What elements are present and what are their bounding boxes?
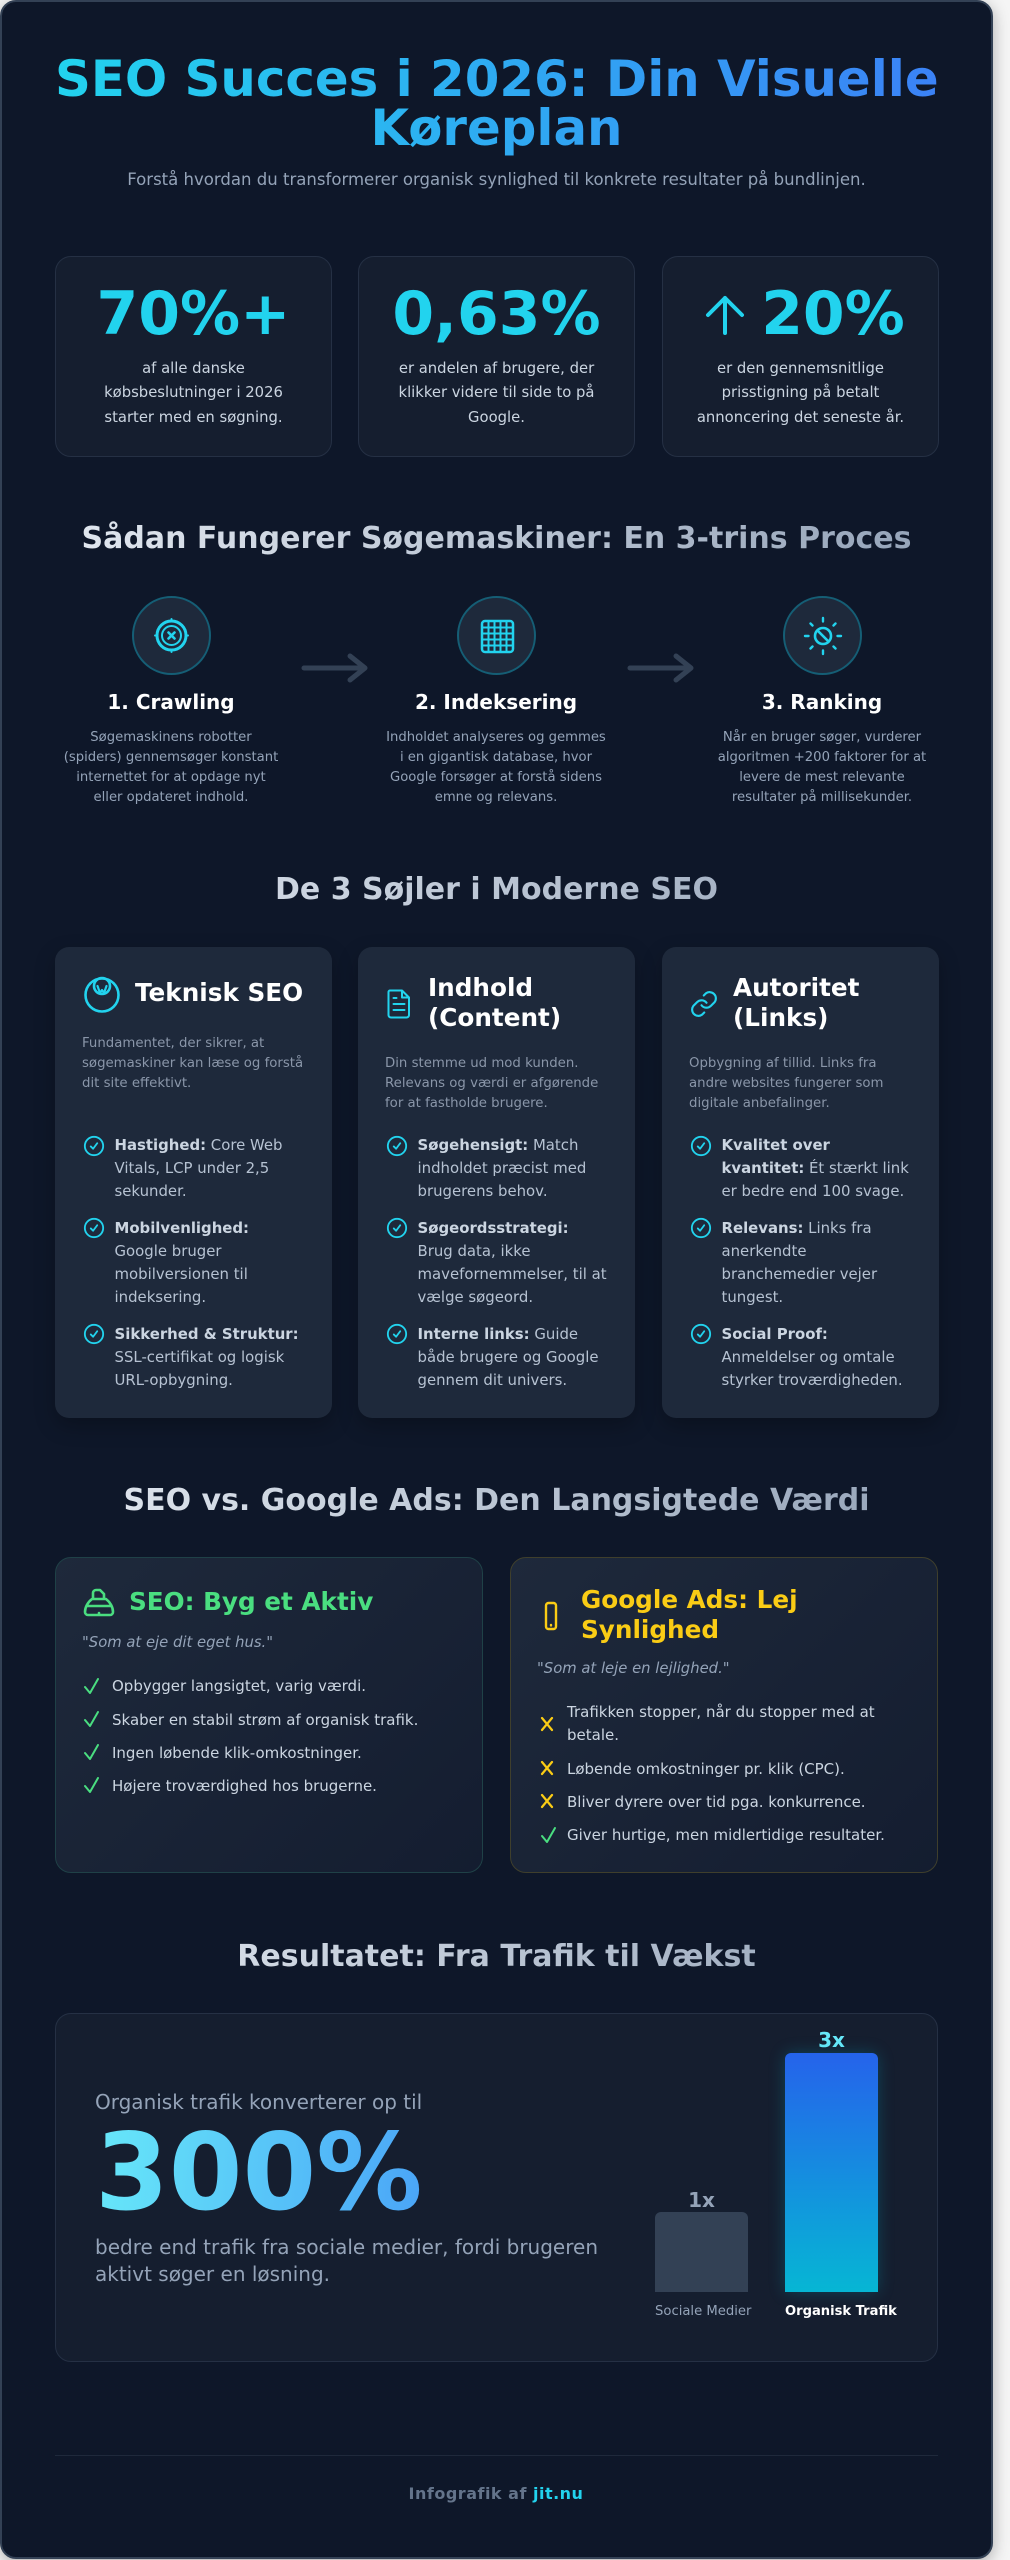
- panel: SEO: SEO: Byg et Aktiv: [129, 1587, 373, 1616]
- panel: indhold: både brugere og Google: [418, 1348, 599, 1366]
- panel: Google Ads: Løbende omkostninger pr. klik (CPC).: [567, 1760, 845, 1778]
- icon: grid: [457, 596, 536, 675]
- panel: indhold: Indhold: [428, 973, 533, 1002]
- list: Søgehensigt: Match: [418, 1136, 578, 1154]
- stat card: 0,63%: Google.: [468, 409, 525, 426]
- step 1: crawling: Søgemaskinens robotter: [90, 730, 252, 745]
- title: [55, 55, 938, 163]
- panel: teknisk SEO: Google bruger: [114, 1242, 222, 1260]
- stat card: 70%+: [55, 256, 332, 457]
- list: indholdet præcist med: [418, 1159, 586, 1177]
- panel: indhold: Brug data, ikke: [418, 1242, 530, 1260]
- panel: teknisk SEO: Teknisk SEO: [135, 978, 303, 1007]
- panel: teknisk SEO: dit site effektivt.: [82, 1076, 191, 1091]
- list: Opbygger langsigtet, varig værdi.: [112, 1677, 366, 1695]
- arrow: step 1 to 2: [302, 654, 368, 682]
- panel: indhold: mavefornemmelser, til at: [418, 1265, 607, 1283]
- panel: SEO: Højere troværdighed hos brugerne.: [112, 1776, 377, 1794]
- stat card: 0,63%: klikker videre til side to på: [398, 384, 594, 401]
- step 1: crawling: (spiders) gennemsøger konstant: [64, 750, 278, 765]
- panel: autoritet: Autoritet: [733, 973, 859, 1002]
- panel: SEO: Skaber en stabil strøm af organisk trafik.: [112, 1710, 418, 1728]
- panel: autoritet: (Links): [733, 1003, 828, 1032]
- list: Kvalitet over: [722, 1136, 830, 1154]
- list: [114, 1136, 282, 1200]
- title: SEO Succes i 2026: Din Visuelle: [55, 50, 939, 108]
- panel: autoritet: anerkendte: [722, 1242, 806, 1260]
- step 3: ranking: resultater på millisekunder.: [732, 790, 912, 805]
- icon: ranking: [783, 596, 862, 675]
- step 3: ranking: levere de mest relevante: [739, 770, 905, 785]
- list: [722, 1136, 909, 1200]
- step 2: indeksering: i en gigantisk database, hvor: [400, 750, 592, 765]
- cross marks: [540, 1716, 554, 1808]
- step 2: indeksering: [386, 596, 606, 805]
- panel: autoritet: branchemedier vejer: [722, 1265, 877, 1283]
- panel: Google Ads: Synlighed: [581, 1615, 719, 1644]
- heading: comparison: SEO vs. Google Ads: Den Langsigtede Værdi: [123, 1483, 870, 1518]
- step 3: ranking: algoritmen +200 faktorer for at: [718, 750, 926, 765]
- heading: pillars: De 3 Søjler i Moderne SEO: [275, 872, 718, 907]
- heading: result: Resultatet: Fra Trafik til Vækst: [237, 1939, 756, 1974]
- panel: indhold: gennem dit univers.: [418, 1371, 567, 1389]
- step 3: ranking: [718, 596, 926, 805]
- heading: result: [55, 1939, 938, 1975]
- check icons: [84, 1136, 104, 1344]
- stat card: 70%+: starter med en søgning.: [104, 409, 283, 426]
- step 1: crawling: internettet for at opdage nyt: [76, 770, 266, 785]
- icon: crawling: [132, 596, 211, 675]
- list: Vitals, LCP under 2,5: [114, 1159, 269, 1177]
- panel: indhold: (Content): [428, 1003, 561, 1032]
- panel: teknisk SEO: Mobilvenlighed:: [114, 1218, 249, 1236]
- panel: autoritet: Opbygning af tillid. Links fra: [689, 1056, 876, 1071]
- panel: Google Ads: "Som at leje en lejlighed.": [537, 1660, 730, 1677]
- title: Køreplan: [370, 99, 623, 157]
- subtitle: Forstå hvordan du transformerer organisk synlighed til konkrete resultater på bundlinjen.: [127, 170, 866, 189]
- bar: 1x: 1x: [688, 2188, 715, 2212]
- stat card: 20%: [662, 256, 939, 457]
- stat card: 20%: 20%: [761, 279, 905, 349]
- panel: indhold: Søgeordsstrategi:: [418, 1218, 569, 1236]
- stat card: 20%: prisstigning på betalt: [722, 384, 879, 401]
- panel: teknisk SEO: Fundamentet, der sikrer, at: [82, 1036, 264, 1051]
- panel: teknisk SEO: SSL-certifikat og logisk: [114, 1348, 284, 1366]
- icon: arrow up: [706, 296, 744, 335]
- icon: bag: [84, 1588, 114, 1616]
- step 3: ranking: 3. Ranking: [762, 690, 882, 714]
- list: betale.: [567, 1726, 619, 1744]
- list: sekunder.: [114, 1182, 187, 1200]
- bar: 3x: 3x: [818, 2028, 845, 2052]
- stat card: 70%+: købsbeslutninger i 2026: [104, 384, 283, 401]
- panel: result: [55, 2013, 938, 2362]
- text: explanation: aktivt søger en løsning.: [95, 2262, 330, 2286]
- icon: phone: [544, 1602, 558, 1630]
- step 1: crawling: eller opdateret indhold.: [94, 790, 248, 805]
- panel: teknisk SEO: URL-opbygning.: [114, 1371, 233, 1389]
- arrow: step 2 to 3: [628, 654, 694, 682]
- panel: teknisk SEO: Sikkerhed & Struktur:: [114, 1324, 299, 1342]
- panel: autoritet: andre websites fungerer som: [689, 1076, 884, 1091]
- text: explanation: bedre end trafik fra sociale medier, fordi brugeren: [95, 2235, 598, 2259]
- panel: indhold: Relevans og værdi er afgørende: [385, 1076, 598, 1091]
- list: brugerens behov.: [418, 1182, 548, 1200]
- check icons: [690, 1136, 712, 1344]
- stat card: 20%: er den gennemsnitlige: [717, 360, 884, 377]
- step 2: indeksering: 2. Indeksering: [415, 690, 577, 714]
- panel: teknisk SEO: [55, 947, 332, 1418]
- panel: indhold: vælge søgeord.: [418, 1288, 533, 1306]
- stat card: 20%: annoncering det seneste år.: [697, 409, 904, 426]
- panel: SEO: [55, 1557, 483, 1873]
- text: explanation: [95, 2235, 598, 2286]
- panel: indhold: Din stemme ud mod kunden.: [385, 1056, 578, 1071]
- icon: teknisk: [84, 976, 120, 1013]
- step 2: indeksering: emne og relevans.: [435, 790, 557, 805]
- list: Trafikken stopper, når du stopper med at: [567, 1703, 875, 1721]
- list: [418, 1136, 586, 1200]
- big number: 300%: [95, 2111, 422, 2234]
- stat card: 70%+: 70%+: [97, 279, 290, 349]
- panel: SEO: Ingen løbende klik-omkostninger.: [112, 1744, 362, 1762]
- panel: indhold: [358, 947, 635, 1418]
- stat card: 0,63%: 0,63%: [392, 279, 601, 349]
- step 2: indeksering: Google forsøger at forstå sidens: [390, 770, 602, 785]
- footer: Infografik af jit.nu: [409, 2484, 583, 2503]
- text: intro: Organisk trafik konverterer op til: [95, 2090, 422, 2114]
- panel: autoritet: Social Proof:: [722, 1324, 828, 1342]
- bar chart: Sociale Medier: [655, 2304, 751, 2319]
- list: kvantitet: Ét stærkt link: [722, 1159, 909, 1177]
- check mark: [541, 1827, 556, 1843]
- big number: [95, 2113, 595, 2233]
- step 1: crawling: 1. Crawling: [107, 690, 235, 714]
- panel: autoritet: styrker troværdigheden.: [722, 1371, 903, 1389]
- heading: process: Sådan Fungerer Søgemaskiner: En 3-trins Proces: [82, 521, 911, 556]
- panel: Google Ads: Giver hurtige, men midlertidige resultater.: [567, 1826, 885, 1844]
- heading: pillars: [55, 872, 938, 908]
- icon: document: [388, 990, 410, 1018]
- panel: Google Ads: [510, 1557, 938, 1873]
- panel: SEO: "Som at eje dit eget hus.": [82, 1634, 273, 1651]
- panel: Google Ads: Bliver dyrere over tid pga. konkurrence.: [567, 1793, 866, 1811]
- stat card: 0,63%: [358, 256, 635, 457]
- panel: indhold: Interne links: Guide: [418, 1324, 578, 1342]
- list: [566, 1703, 875, 1744]
- panel: autoritet: digitale anbefalinger.: [689, 1096, 830, 1111]
- bar chart: Organisk Trafik: [785, 2304, 897, 2319]
- list: Hastighed: Core Web: [114, 1136, 282, 1154]
- bar chart: [655, 2028, 897, 2319]
- step 1: crawling: [64, 596, 278, 805]
- check icons: [386, 1136, 408, 1344]
- panel: teknisk SEO: søgemaskiner kan læse og forstå: [82, 1056, 303, 1071]
- list: er bedre end 100 svage.: [722, 1182, 904, 1200]
- panel: teknisk SEO: indeksering.: [114, 1288, 206, 1306]
- step 2: indeksering: Indholdet analyseres og gemmes: [386, 730, 606, 745]
- stat card: 0,63%: er andelen af brugere, der: [399, 360, 594, 377]
- panel: Google Ads: Google Ads: Lej: [581, 1585, 798, 1614]
- panel: autoritet: [662, 947, 939, 1418]
- panel: autoritet: tungest.: [722, 1288, 783, 1306]
- stat card: 70%+: af alle danske: [142, 360, 245, 377]
- step 3: ranking: Når en bruger søger, vurderer: [723, 730, 921, 745]
- panel: indhold: for at fastholde brugere.: [385, 1096, 548, 1111]
- check marks: [84, 1678, 99, 1793]
- icon: link: [691, 991, 717, 1017]
- panel: teknisk SEO: mobilversionen til: [114, 1265, 248, 1283]
- panel: autoritet: Anmeldelser og omtale: [722, 1348, 895, 1366]
- panel: autoritet: Relevans: Links fra: [722, 1218, 872, 1236]
